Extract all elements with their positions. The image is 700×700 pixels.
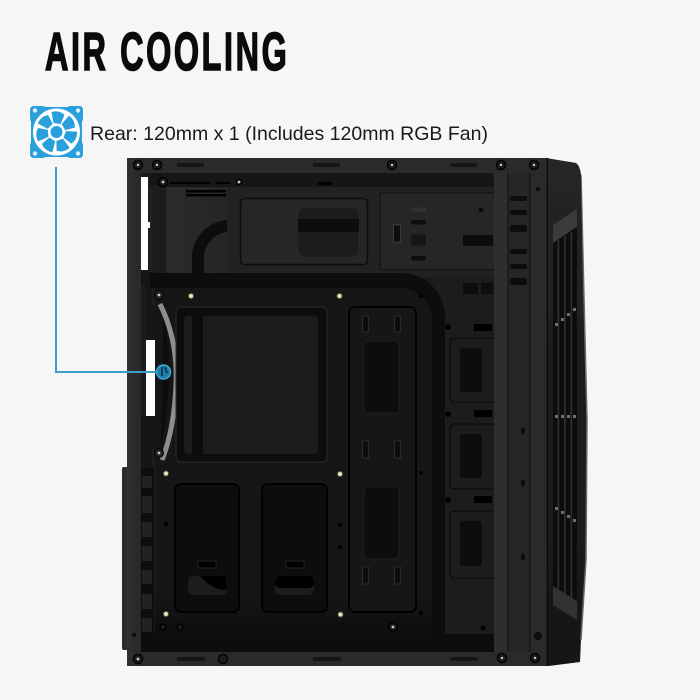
drive bay windows xyxy=(460,348,482,566)
front bezel top facet xyxy=(553,209,577,243)
black arc xyxy=(198,226,228,276)
icon: fan xyxy=(30,106,83,158)
front bezel bottom facet xyxy=(553,586,577,620)
tray shoulder band xyxy=(150,273,445,640)
rear expansion slots xyxy=(141,468,154,640)
tray holes xyxy=(164,294,423,615)
top rail slots xyxy=(177,163,478,661)
fan screw bottom xyxy=(154,448,164,458)
vent markers xyxy=(555,308,576,522)
screw highlights xyxy=(137,164,536,660)
title: AIR COOLING xyxy=(45,23,287,82)
drive cage slots and holes xyxy=(445,324,492,630)
case rear bracket xyxy=(122,467,128,650)
expansion slot texture xyxy=(142,476,152,632)
rear gap fan xyxy=(145,285,163,468)
rear fan ring xyxy=(160,304,176,460)
callout marker on fan xyxy=(156,365,170,379)
right upper plate holes xyxy=(394,208,493,294)
bottom black band xyxy=(141,634,494,653)
tray panel 3 xyxy=(175,484,239,612)
connector line xyxy=(56,167,158,372)
case screws xyxy=(134,160,540,664)
fan screw top xyxy=(154,290,164,300)
pillar seam xyxy=(508,158,548,666)
upper band slots xyxy=(170,182,332,196)
panel 2 windows xyxy=(364,341,399,559)
brass standoffs xyxy=(164,294,343,617)
rear left pillar xyxy=(127,158,141,666)
right upper plate xyxy=(380,193,495,270)
tray panel 1 inner xyxy=(184,316,318,454)
psu plate xyxy=(227,187,495,277)
front pillars xyxy=(494,173,508,652)
rear gap upper xyxy=(141,177,150,270)
tray panel 2 xyxy=(349,307,416,612)
motherboard tray xyxy=(155,288,432,636)
upper compartment xyxy=(150,173,495,277)
front bezel xyxy=(548,159,585,666)
psu window xyxy=(298,207,359,257)
top rail xyxy=(127,158,548,173)
tray panel 1 xyxy=(176,307,327,462)
front right pillar xyxy=(530,173,547,652)
drive cage xyxy=(445,316,494,636)
psu window band xyxy=(298,219,359,232)
bottom rail xyxy=(127,652,548,666)
case silhouette xyxy=(127,158,587,666)
upper inner band xyxy=(150,173,495,187)
rear fan blades xyxy=(161,318,169,447)
drive bays xyxy=(450,338,496,578)
panel 3 and 4 cutouts xyxy=(188,561,314,595)
front middle pillar xyxy=(508,173,530,652)
psu raised panel xyxy=(240,198,368,264)
subtitle: rear fan specification: Rear: 120mm x 1 (Includes 120mm RGB Fan) xyxy=(90,123,488,145)
tray panel 1 strip xyxy=(192,316,203,454)
tray panel 4 xyxy=(262,484,327,612)
front bezel vents xyxy=(553,227,577,601)
computer case xyxy=(122,158,587,666)
panel 2 slots xyxy=(362,316,400,584)
rear fan dark housing xyxy=(141,272,163,468)
vent slats xyxy=(558,232,572,598)
side edge highlight xyxy=(581,175,587,640)
upper left rail xyxy=(151,186,166,274)
pillar slots xyxy=(132,187,542,640)
